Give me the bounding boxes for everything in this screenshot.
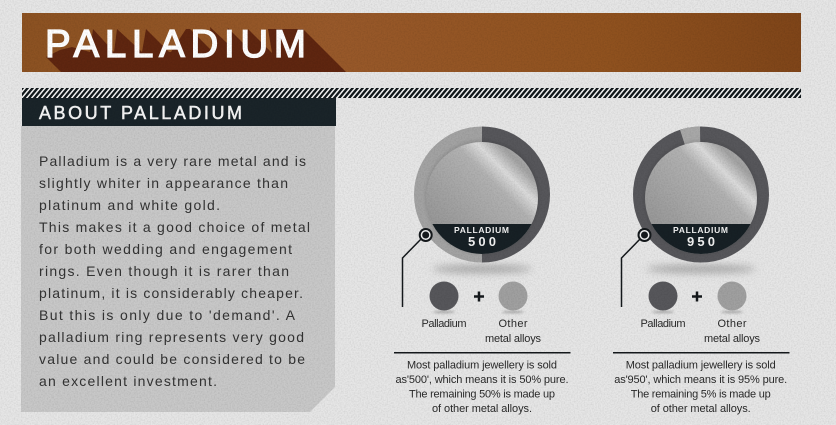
donut chart 950: 950 <box>687 234 715 249</box>
description 500: The remaining 50% is made up <box>409 388 555 400</box>
donut chart 500: PALLADIUM <box>454 225 509 235</box>
legend: other metal alloys: Other <box>498 318 528 330</box>
legend: palladium: Palladium <box>640 318 686 330</box>
body text: platinum, it is considerably cheaper. <box>39 285 303 301</box>
description 950: of other metal alloys. <box>651 403 751 415</box>
legend: other metal alloys: metal alloys <box>485 333 542 345</box>
plus sign <box>692 292 702 302</box>
description 950 <box>614 360 787 415</box>
donut chart 950: PALLADIUM <box>673 225 728 235</box>
donut chart 500: 500 <box>468 234 496 249</box>
description 500: Most palladium jewellery is sold <box>407 360 557 372</box>
heading bar <box>22 98 336 126</box>
callout marker <box>402 228 433 307</box>
body text: Palladium is a very rare metal and is <box>39 153 306 169</box>
donut chart 500 <box>414 126 550 273</box>
description 950: Most palladium jewellery is sold <box>626 360 776 372</box>
legend: palladium <box>640 282 686 330</box>
heading bar: ABOUT PALLADIUM <box>39 103 242 123</box>
plus sign <box>474 292 484 302</box>
callout marker <box>622 228 652 307</box>
donut chart 950 <box>633 126 769 273</box>
panel background <box>21 126 335 412</box>
body text: rings. Even though it is rarer than <box>39 263 289 279</box>
description 500 <box>396 360 568 415</box>
legend: other metal alloys <box>704 282 760 345</box>
title: PALLADIUM <box>45 23 306 66</box>
description 500: of other metal alloys. <box>432 403 532 415</box>
body text: platinum and white gold. <box>39 197 220 213</box>
panel: palladium 950 <box>613 126 790 415</box>
body text: palladium ring represents very good <box>39 329 304 345</box>
body text: an excellent investment. <box>39 373 217 389</box>
legend: palladium: Palladium <box>422 318 466 330</box>
panel: palladium 500 <box>394 126 570 415</box>
description 950: The remaining 5% is made up <box>631 388 771 400</box>
legend: palladium <box>422 282 466 330</box>
panel: about palladium <box>21 98 336 412</box>
body text: for both wedding and engagement <box>39 241 292 257</box>
body text: slightly whiter in appearance than <box>39 175 288 191</box>
header banner <box>22 13 801 72</box>
legend: other metal alloys: Other <box>718 318 747 330</box>
legend: other metal alloys <box>485 282 542 345</box>
body text <box>39 153 310 389</box>
description 950: as'950', which means it is 95% pure. <box>614 374 787 386</box>
description 500: as'500', which means it is 50% pure. <box>396 374 568 386</box>
title long shadow <box>46 27 346 72</box>
body text: This makes it a good choice of metal <box>39 219 310 235</box>
body text: But this is only due to 'demand'. A <box>39 307 296 323</box>
legend: other metal alloys: metal alloys <box>704 333 760 345</box>
body text: value and could be considered to be <box>39 351 305 367</box>
